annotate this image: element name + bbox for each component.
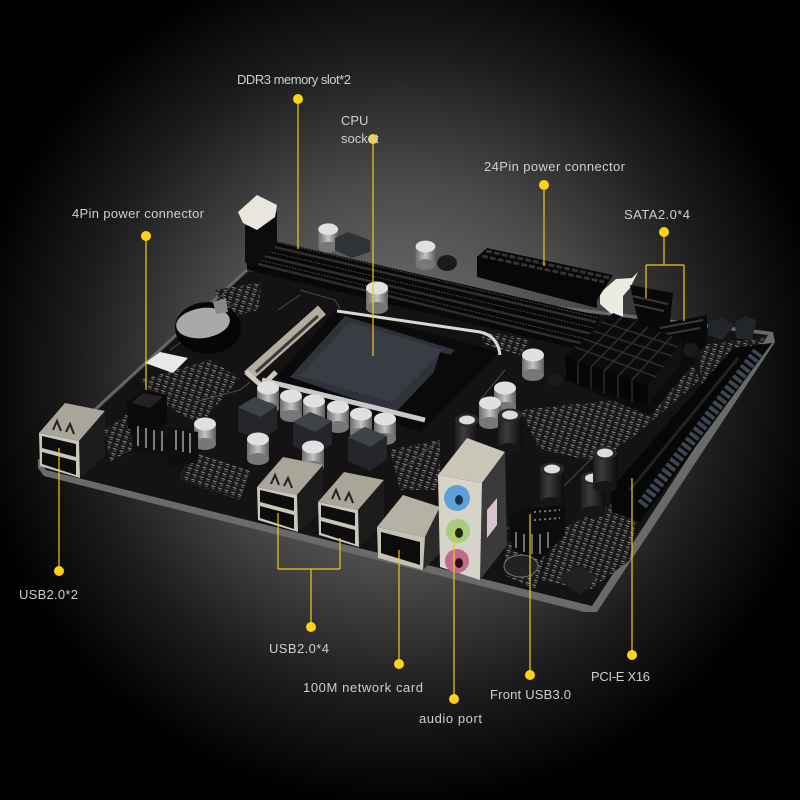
label: CPU socket: socket	[341, 131, 379, 146]
leader lines	[59, 99, 684, 699]
board traces	[40, 271, 600, 530]
label: CPU socket: CPU	[341, 113, 368, 128]
USB ports left pair	[39, 403, 105, 478]
QR sticker	[145, 352, 188, 373]
24-pin power connector	[477, 248, 613, 308]
heatsink	[547, 313, 699, 416]
CPU socket	[246, 308, 500, 432]
USB ports right	[318, 472, 384, 547]
board rim	[38, 268, 775, 612]
label: PCI-E X16: PCI-E X16	[591, 669, 650, 684]
VRM capacitors and chokes	[194, 348, 617, 518]
PCI-E X16 slot	[610, 343, 772, 522]
top-edge capacitors	[318, 223, 457, 314]
label: USB 2 ports: USB2.0*2	[19, 587, 78, 602]
4-pin power connector	[127, 390, 198, 468]
label: DDR3 memory slot: DDR3 memory slot*2	[237, 72, 351, 87]
label: network card: 100M network card	[303, 680, 423, 695]
label: USB 4 ports: USB2.0*4	[269, 641, 329, 656]
DDR3 memory slots	[238, 195, 638, 352]
left slot post	[245, 212, 277, 268]
label: SATA: SATA2.0*4	[624, 207, 690, 222]
coin battery	[174, 298, 241, 354]
label: 24Pin power connector: 24Pin power connector	[484, 159, 626, 174]
label: 4Pin power connector: 4Pin power connector	[72, 206, 205, 221]
front USB header	[504, 502, 565, 577]
chipset square	[558, 565, 598, 594]
white latch right	[600, 272, 638, 318]
white latch left	[238, 195, 277, 230]
label dots	[54, 94, 669, 704]
motherboard	[38, 195, 775, 612]
silkscreen patches	[105, 282, 765, 590]
label: Front USB3.0: Front USB3.0	[490, 687, 571, 702]
small jumpers top right	[708, 316, 756, 340]
label: audio port: audio port	[419, 711, 482, 726]
SATA connectors	[630, 285, 707, 360]
network port	[377, 495, 440, 570]
board PCB	[40, 271, 768, 606]
USB ports middle	[257, 457, 323, 532]
audio port	[438, 438, 507, 580]
